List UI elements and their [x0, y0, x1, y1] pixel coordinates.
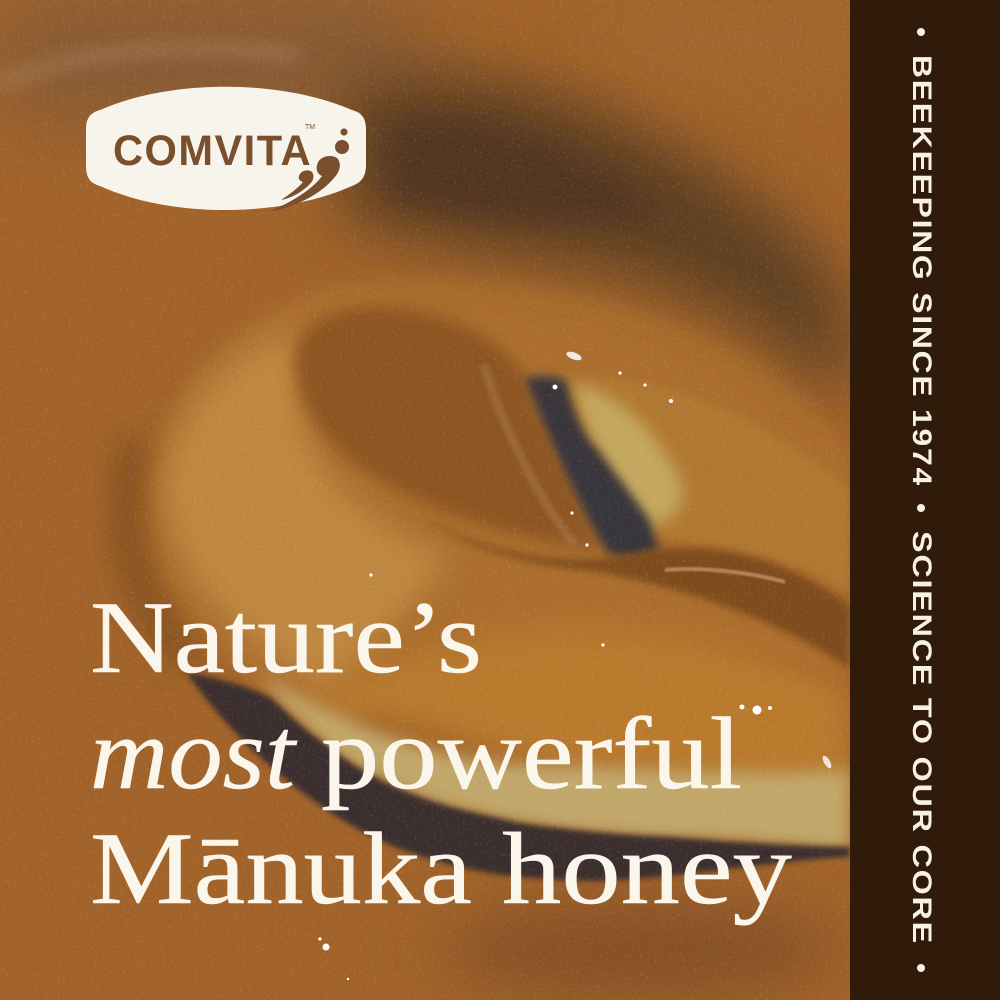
tongue of pale honey: [560, 375, 850, 590]
dark slit: [525, 377, 660, 558]
icon: bee droplets: [268, 128, 349, 212]
sparkles: [318, 350, 833, 980]
shadow left of swirl: [126, 440, 190, 660]
headline: honey: [502, 812, 793, 926]
brown ribbon: [434, 525, 850, 670]
bullet: [917, 28, 925, 36]
headline: Mānuka: [90, 812, 472, 926]
wordmark: COMVITA: [113, 127, 312, 175]
shadow band across the top: [340, 73, 850, 410]
tagline part one: BEEKEEPING SINCE 1974: [907, 55, 937, 487]
headline: [90, 581, 793, 926]
tagline part two: SCIENCE TO OUR CORE: [907, 531, 937, 945]
outer swirl: light orange body: [160, 282, 846, 688]
headline: most: [90, 697, 297, 811]
bullet: [917, 504, 925, 512]
trademark: TM: [305, 124, 315, 131]
pale crescent: [262, 676, 850, 850]
headline: Nature’s: [90, 581, 482, 695]
logo: Comvita badge: [86, 87, 366, 212]
glass ridge in dish: [484, 365, 575, 545]
badge shape: [86, 87, 366, 210]
lower orange fold: [346, 629, 850, 774]
inner dish: [295, 307, 600, 550]
dark crescent: [186, 672, 850, 881]
bullet: [917, 964, 925, 972]
sidebar: tagline strip: [850, 0, 1000, 1000]
headline: powerful: [321, 697, 742, 811]
